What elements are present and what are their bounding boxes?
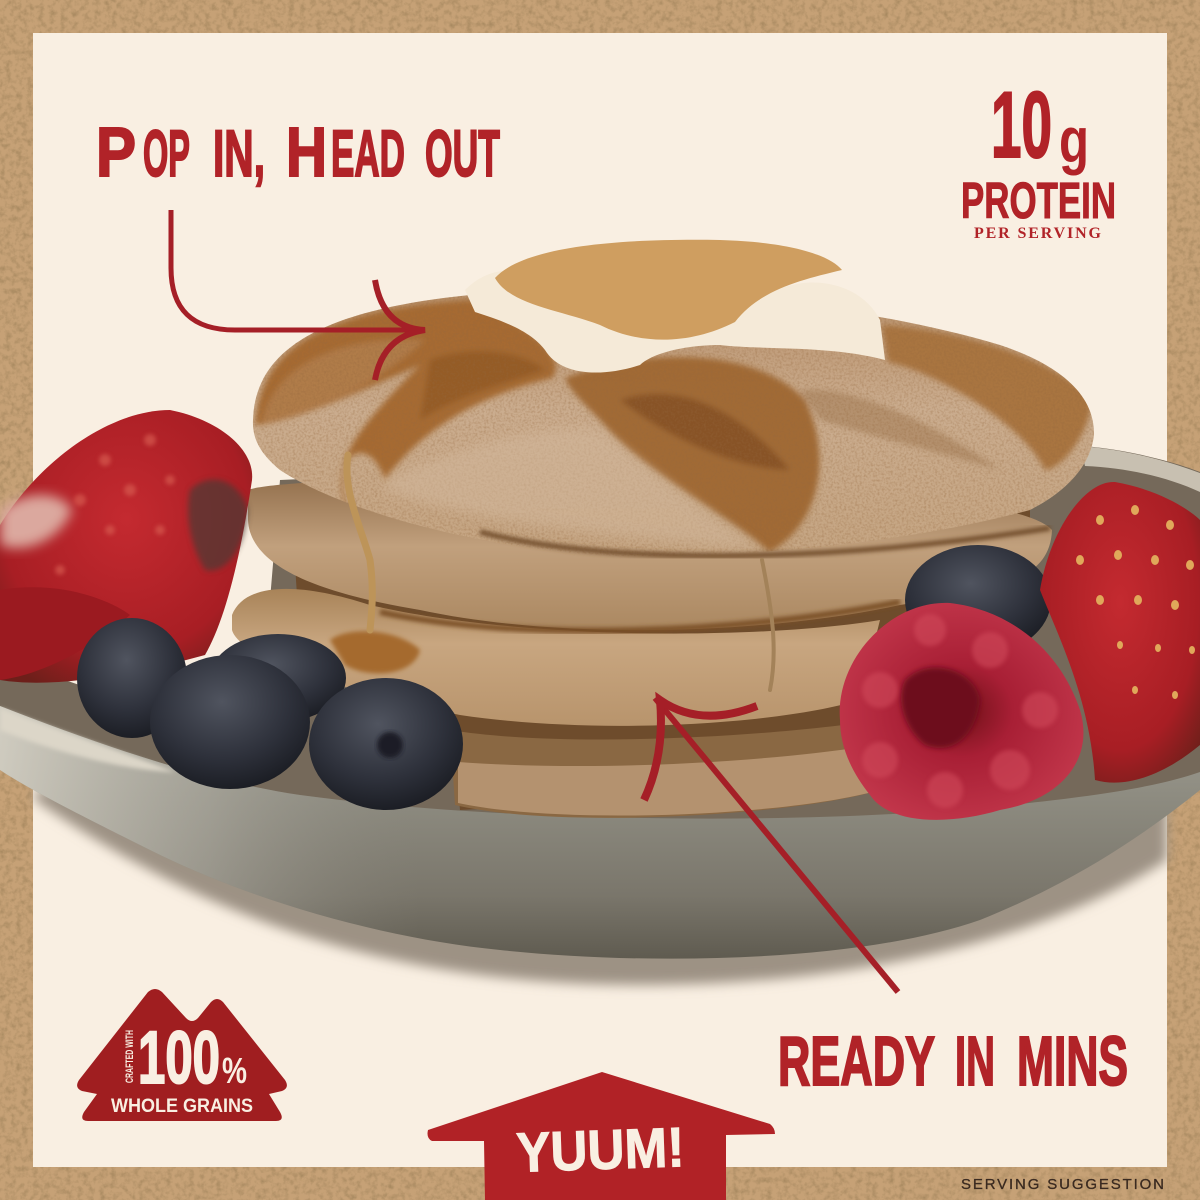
- title: pop in, head out: OP: [143, 116, 190, 190]
- IN: IN: [955, 1022, 995, 1100]
- arrow: ready in mins: [644, 698, 898, 992]
- 100 percent: 100: [138, 1016, 220, 1099]
- pancake edge light: [385, 428, 760, 550]
- stack backing: [290, 490, 1030, 810]
- protein callout: [961, 72, 1116, 242]
- left strawberry: [0, 410, 252, 683]
- crafted with: CRAFTED WITH: [124, 1030, 136, 1083]
- READY: READY: [778, 1022, 935, 1100]
- badge: 100% whole grains: [77, 989, 287, 1121]
- serving suggestion note: SERVING SUGGESTION: [961, 1176, 1164, 1193]
- syrup pool: [330, 631, 420, 673]
- P: P: [96, 113, 136, 191]
- protein word: PROTEIN: [961, 172, 1116, 229]
- second pancake: [248, 478, 1052, 630]
- OUT: OUT: [425, 116, 500, 190]
- yuum label: YUUM!: [515, 1115, 685, 1184]
- unit g: g: [1059, 104, 1089, 176]
- caption: ready in mins: [778, 1022, 1128, 1100]
- title: pop in, head out: [96, 113, 500, 191]
- plate shadow: [35, 790, 1167, 985]
- H: H: [286, 113, 327, 191]
- butter with caramel: [465, 240, 885, 373]
- IN,: IN,: [213, 116, 265, 190]
- up arrow tab: [428, 1072, 775, 1200]
- raspberry: [840, 603, 1083, 820]
- photo: pancake stack on a plate with berries: [0, 240, 1200, 985]
- EAD: EAD: [331, 116, 405, 190]
- whole grains: WHOLE GRAINS: [111, 1096, 253, 1117]
- per serving: PER SERVING: [974, 225, 1102, 242]
- top pancake: [253, 290, 1094, 556]
- percent sign: %: [222, 1050, 247, 1091]
- right strawberry: [1040, 482, 1200, 783]
- plate back and inner: [0, 445, 1200, 830]
- bottom pancake: [450, 720, 880, 818]
- blueberries: [77, 545, 1051, 810]
- plate body: [0, 706, 1200, 959]
- cinnamon and syrup patches: [253, 290, 1095, 560]
- syrup drips: [347, 455, 774, 690]
- arrow: pop in: [171, 210, 425, 380]
- MINS: MINS: [1017, 1022, 1128, 1100]
- third pancake: [232, 589, 880, 726]
- protein amount: 10: [991, 72, 1052, 177]
